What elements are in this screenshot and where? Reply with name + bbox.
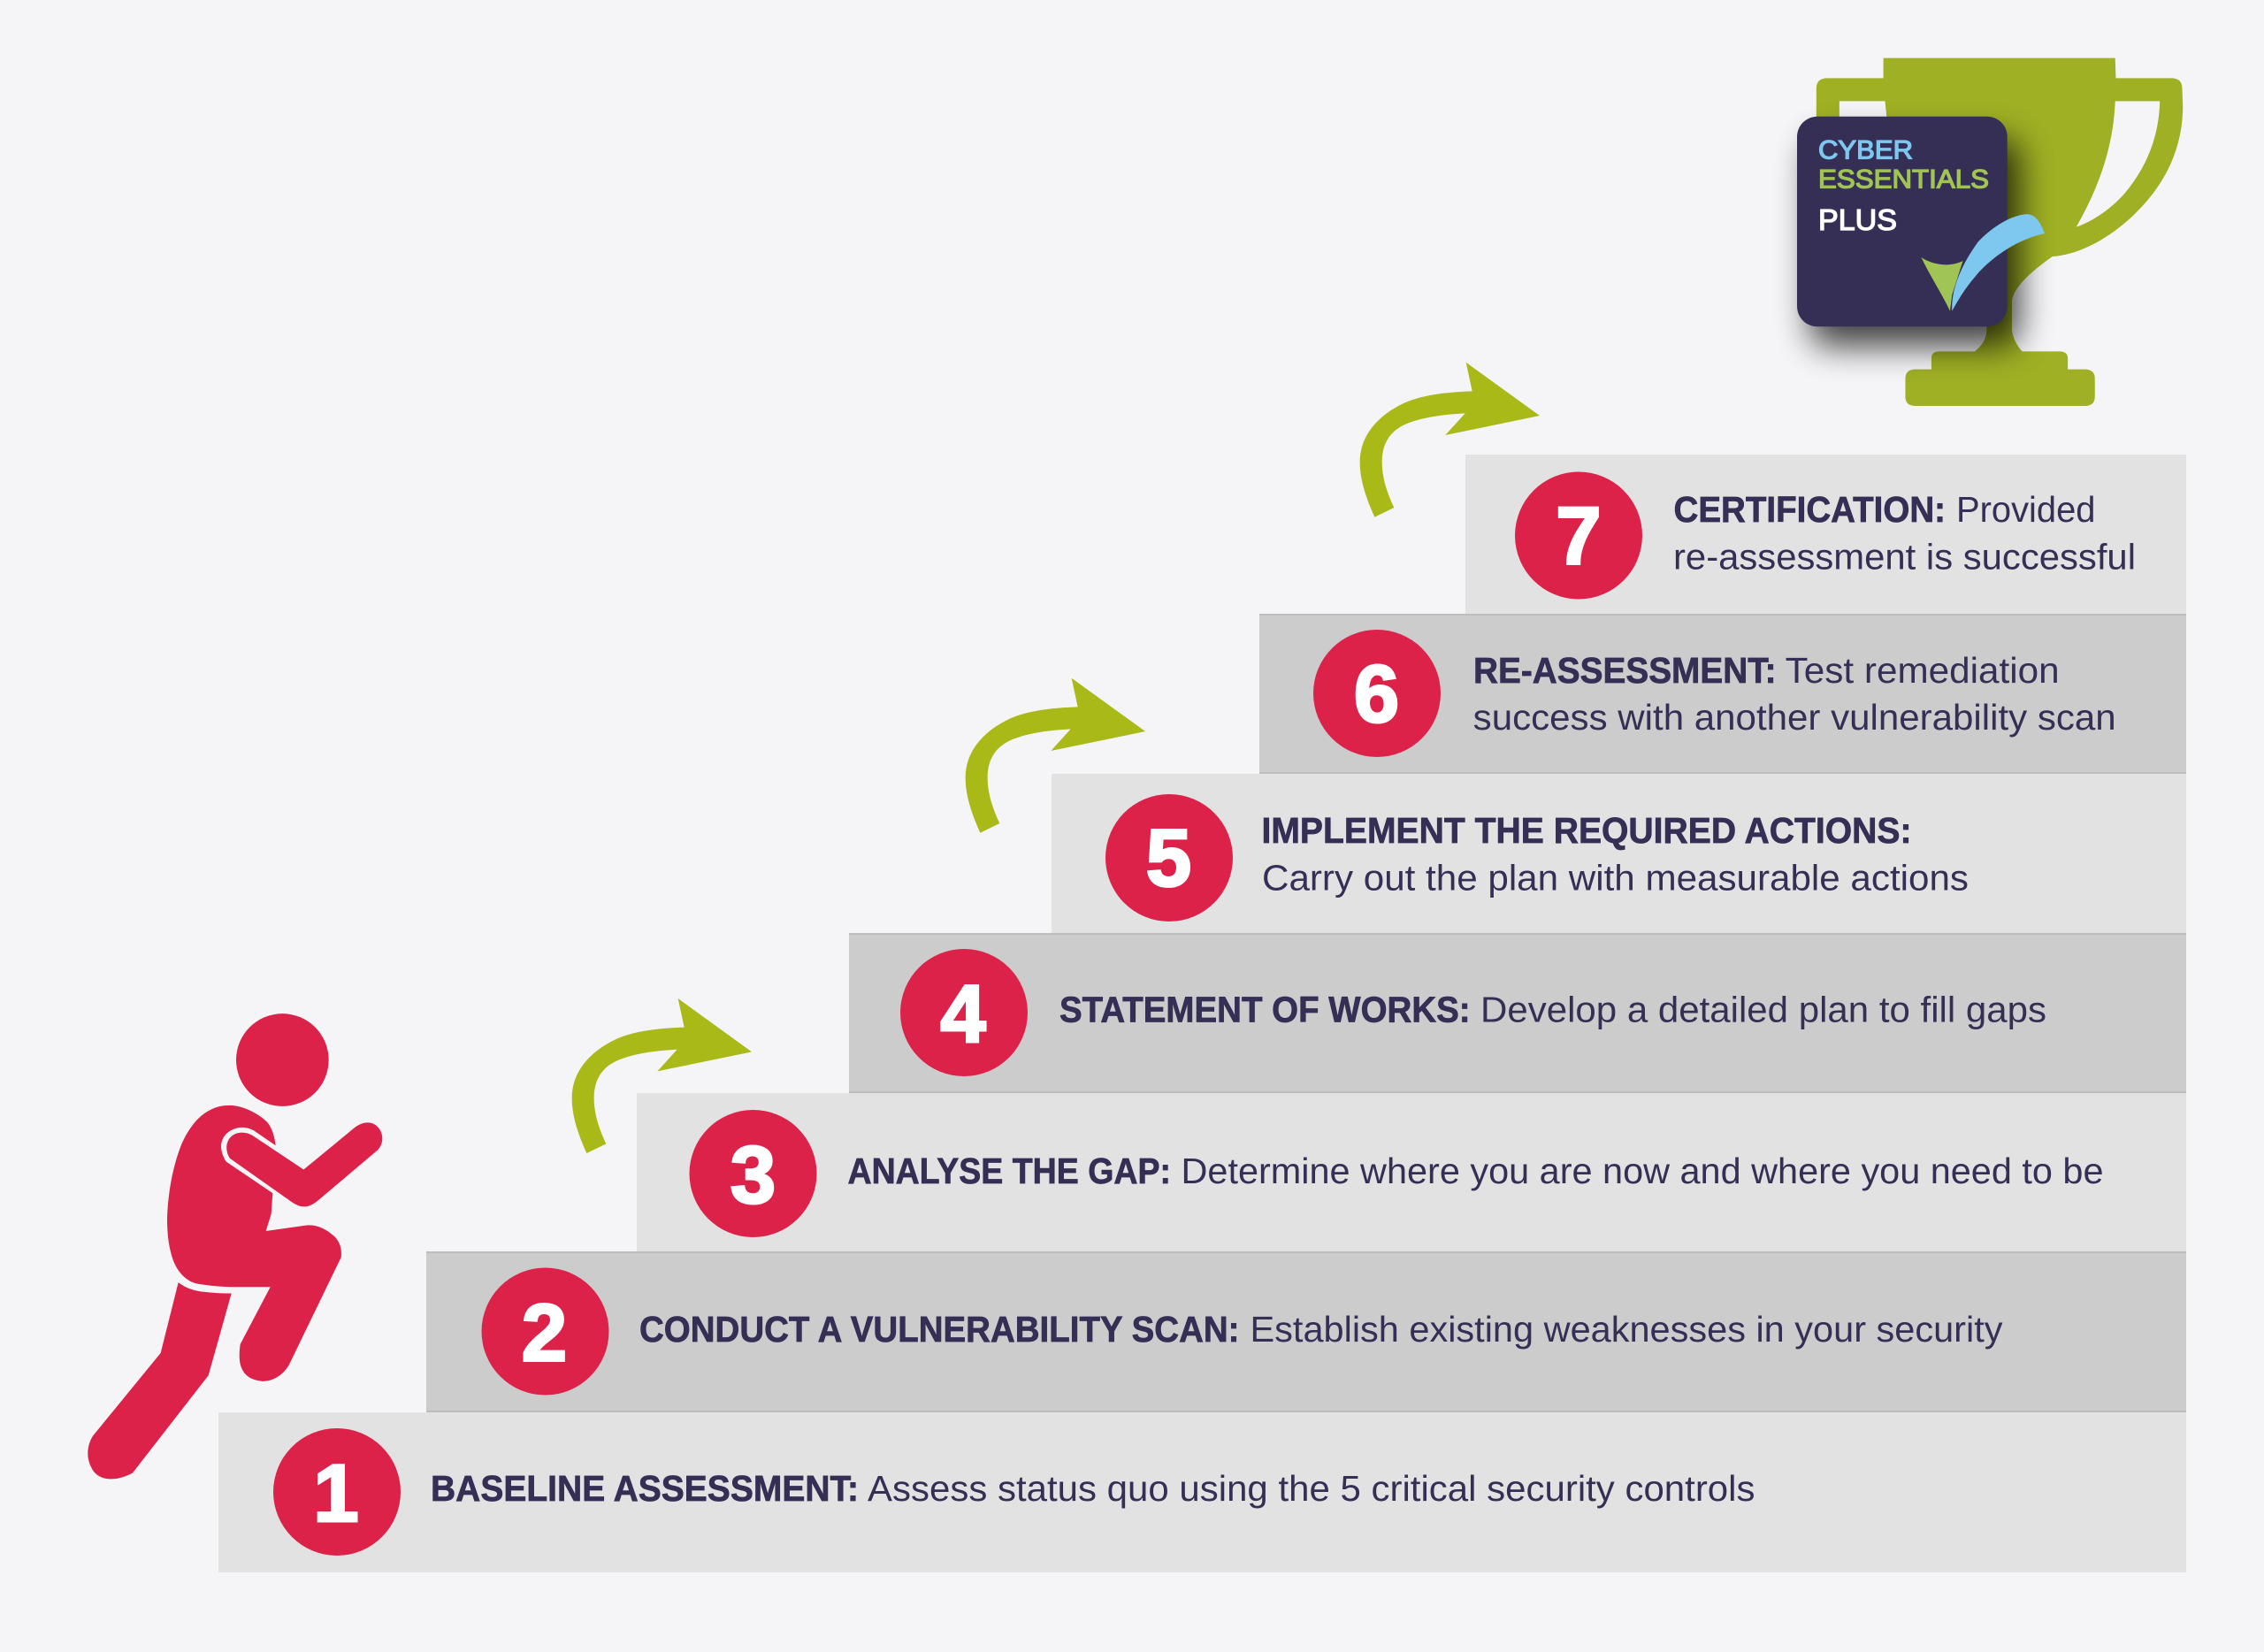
number badge 1 [273, 1428, 401, 1556]
step 4 text: Develop a detailed plan to fill gaps [1480, 990, 2046, 1030]
number badge 4: 4 [940, 969, 986, 1059]
step 2: conduct a vulnerability scan [426, 1251, 2186, 1412]
step 6 text: success with another vulnerability scan [1473, 697, 2116, 738]
number badge 7 [1515, 472, 1642, 600]
step 1 text [431, 1468, 1755, 1509]
step 7 text: Provided [1956, 489, 2096, 530]
step 7 text: CERTIFICATION: [1673, 489, 1946, 530]
step 3 text: Determine where you are now and where you need to be [1182, 1151, 2103, 1191]
step 7 text [1673, 489, 2136, 577]
icon: climbing person [88, 1013, 382, 1479]
badge wordmark: PLUS [1818, 203, 1897, 236]
step 5 text: IMPLEMENT THE REQUIRED ACTIONS: [1261, 810, 1912, 851]
number badge 2 [481, 1268, 608, 1396]
badge wordmark: ESSENTIALS [1818, 165, 1989, 195]
number badge 5: 5 [1146, 814, 1191, 904]
arrow: step 7 to trophy [1360, 363, 1540, 517]
number badge 6 [1313, 630, 1441, 757]
step 7: certification [1465, 455, 2186, 614]
number badge 1: 1 [313, 1449, 359, 1539]
number badge 4 [900, 949, 1028, 1076]
badge checkmark [1921, 214, 2045, 311]
step 1: baseline assessment [218, 1412, 2186, 1572]
number badge 3 [690, 1110, 817, 1237]
icon: trophy with certification badge [1797, 58, 2183, 406]
number badge 2: 2 [522, 1288, 567, 1378]
step 2 text: CONDUCT A VULNERABILITY SCAN: [639, 1309, 1240, 1350]
number badge 5 [1105, 794, 1233, 922]
step 4 text: STATEMENT OF WORKS: [1059, 990, 1471, 1030]
step 4: statement of works [849, 933, 2186, 1093]
arrow: step 5 to step 6 [966, 678, 1145, 833]
number badge 6: 6 [1354, 649, 1399, 739]
number badge 7: 7 [1556, 492, 1602, 582]
step 5: implement the required actions [1052, 774, 2186, 933]
certification badge [1797, 117, 2045, 326]
step 4 text [1059, 990, 2046, 1030]
step 5 text [1261, 810, 1969, 899]
step 1 text: BASELINE ASSESSMENT: [431, 1468, 859, 1509]
badge wordmark [1818, 135, 1989, 236]
step 6 text: Test remediation [1786, 650, 2060, 691]
step 2 text [639, 1309, 2003, 1350]
badge wordmark: CYBER [1818, 135, 1913, 164]
step 7 text: re-assessment is successful [1673, 536, 2136, 577]
step 3: analyse the gap [637, 1093, 2186, 1251]
trophy [1817, 58, 2183, 406]
step 6: re-assessment [1259, 614, 2186, 774]
step 6 text: RE-ASSESSMENT: [1473, 650, 1776, 691]
step 1 text: Assess status quo using the 5 critical security controls [868, 1468, 1755, 1509]
number badge 3: 3 [730, 1130, 776, 1220]
step 5 text: Carry out the plan with measurable actions [1262, 858, 1969, 899]
step 3 text: ANALYSE THE GAP: [847, 1151, 1171, 1191]
step 2 text: Establish existing weaknesses in your security [1251, 1309, 2003, 1350]
step 6 text [1473, 650, 2116, 738]
arrow: step 3 to step 5 [572, 998, 752, 1153]
